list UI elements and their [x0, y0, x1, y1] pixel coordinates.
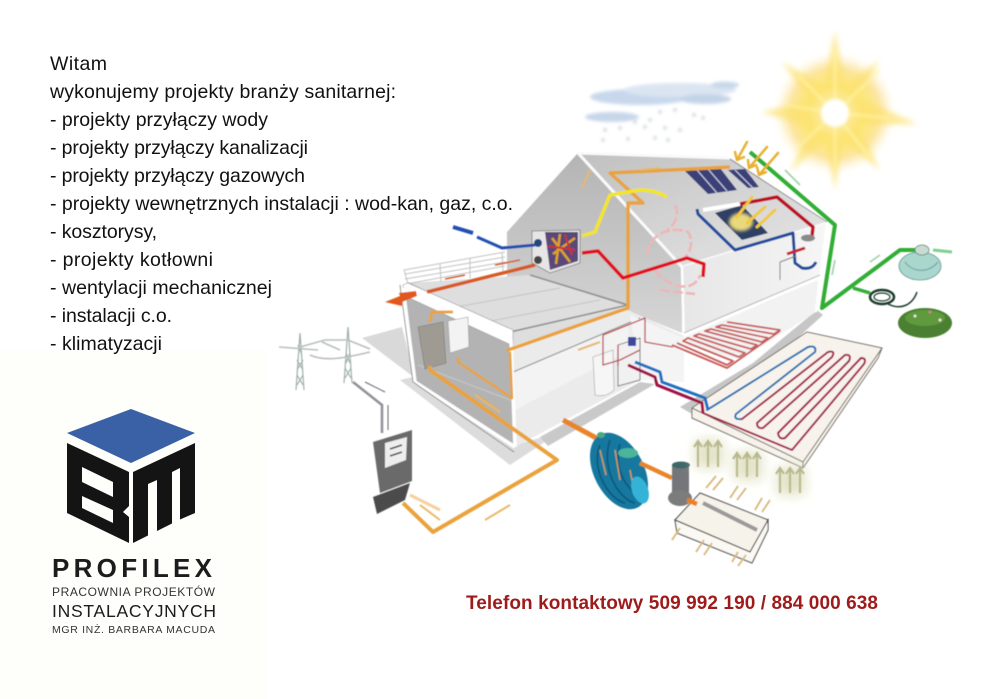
logo: BM Profilex — [52, 409, 216, 636]
icon: garden bush — [898, 308, 952, 338]
text block: intro and services list: - klimatyzacji — [50, 333, 162, 355]
logo wordmark: MGR INŻ. BARBARA MACUDA — [52, 623, 215, 636]
pipe: orange exhaust — [385, 265, 535, 306]
illustration: house installation diagram — [279, 142, 952, 566]
icon: solar thermal collector — [715, 205, 768, 240]
ground loop: crimson — [703, 352, 865, 450]
text block: intro and services list: - wentylacji mechanicznej — [50, 277, 272, 299]
pipe: blue air intake — [453, 227, 535, 248]
filter chamber — [668, 462, 692, 506]
interior box — [618, 338, 640, 386]
icon: BM cube — [67, 409, 195, 543]
text block: intro and services list: - projekty przyłączy gazowych — [50, 165, 305, 187]
manifold — [628, 337, 636, 346]
boiler — [448, 317, 469, 353]
solar tank — [801, 234, 815, 242]
flow arrows on pipes — [420, 168, 660, 520]
icon: garden hose — [870, 290, 917, 307]
icon: rain cloud — [585, 82, 739, 141]
building: ground floor wall — [513, 310, 684, 447]
logo wordmark: PROFILEX — [52, 553, 213, 583]
hot water tank — [593, 350, 614, 396]
text block: intro and services list: - instalacji c.o. — [50, 305, 172, 327]
background panel: off-white logo area — [0, 350, 268, 699]
text block: intro and services list: - projekty przyłączy kanalizacji — [50, 137, 308, 159]
terrace floor — [408, 275, 628, 347]
icon: solar panels — [685, 168, 759, 194]
circulation arcs — [647, 205, 700, 294]
building: gable wall — [507, 153, 682, 333]
icon: power pylons — [279, 327, 370, 390]
icons: soil flow arrows — [672, 476, 770, 566]
text block: intro and services list: Witam — [50, 53, 107, 75]
contact phone: Telefon kontaktowy 509 992 190 / 884 000 638 — [466, 593, 878, 614]
septic tank — [563, 420, 660, 519]
pipe: tank to filter — [640, 463, 672, 478]
pipe: red — [582, 251, 704, 278]
icon: electric meter — [373, 430, 412, 514]
ground shadows — [362, 310, 823, 465]
text block: intro and services list: - projekty przyłączy wody — [50, 109, 268, 131]
logo wordmark — [52, 553, 216, 636]
railing — [404, 252, 505, 284]
icons: ground heat up arrows — [694, 440, 805, 495]
ground collector bed — [692, 332, 882, 468]
text block: intro and services list: - kosztorysy, — [50, 221, 157, 243]
heat unit — [532, 230, 580, 273]
room: cutaway interior — [403, 290, 515, 445]
soil infiltration block — [675, 493, 768, 563]
icon: sun — [762, 30, 918, 190]
icon: rainwater tank — [899, 245, 941, 280]
electrical cabinet — [418, 322, 446, 369]
ground loop: blue — [707, 347, 815, 419]
underfloor heating coil — [672, 322, 780, 368]
building: roof — [578, 153, 827, 267]
building: upper right wall — [682, 223, 827, 333]
text block: intro and services list: - projekty wewnętrznych instalacji : wod-kan, gaz, c.o. — [50, 193, 513, 215]
building: lower right wall — [684, 280, 818, 360]
pipe: orange gas/electric riser — [508, 167, 730, 352]
pipe: yellow — [582, 190, 667, 236]
stair pipes to ground loop — [628, 362, 708, 413]
solar arrows — [735, 142, 778, 227]
text block: intro and services list — [49, 53, 513, 355]
text block: intro and services list: - projekty kotłowni — [50, 249, 213, 271]
cable: grid to meter — [353, 382, 382, 433]
logo wordmark: INSTALACYJNYCH — [52, 601, 216, 621]
logo wordmark: PRACOWNIA PROJEKTÓW — [52, 584, 216, 599]
pipe: green rainwater — [750, 152, 952, 308]
pipes: solar circuit — [697, 197, 816, 280]
text block: intro and services list: wykonujemy projekty branży sanitarnej: — [49, 81, 396, 103]
interior: red heating lines — [603, 318, 673, 366]
pipes: electricity route — [403, 312, 557, 532]
